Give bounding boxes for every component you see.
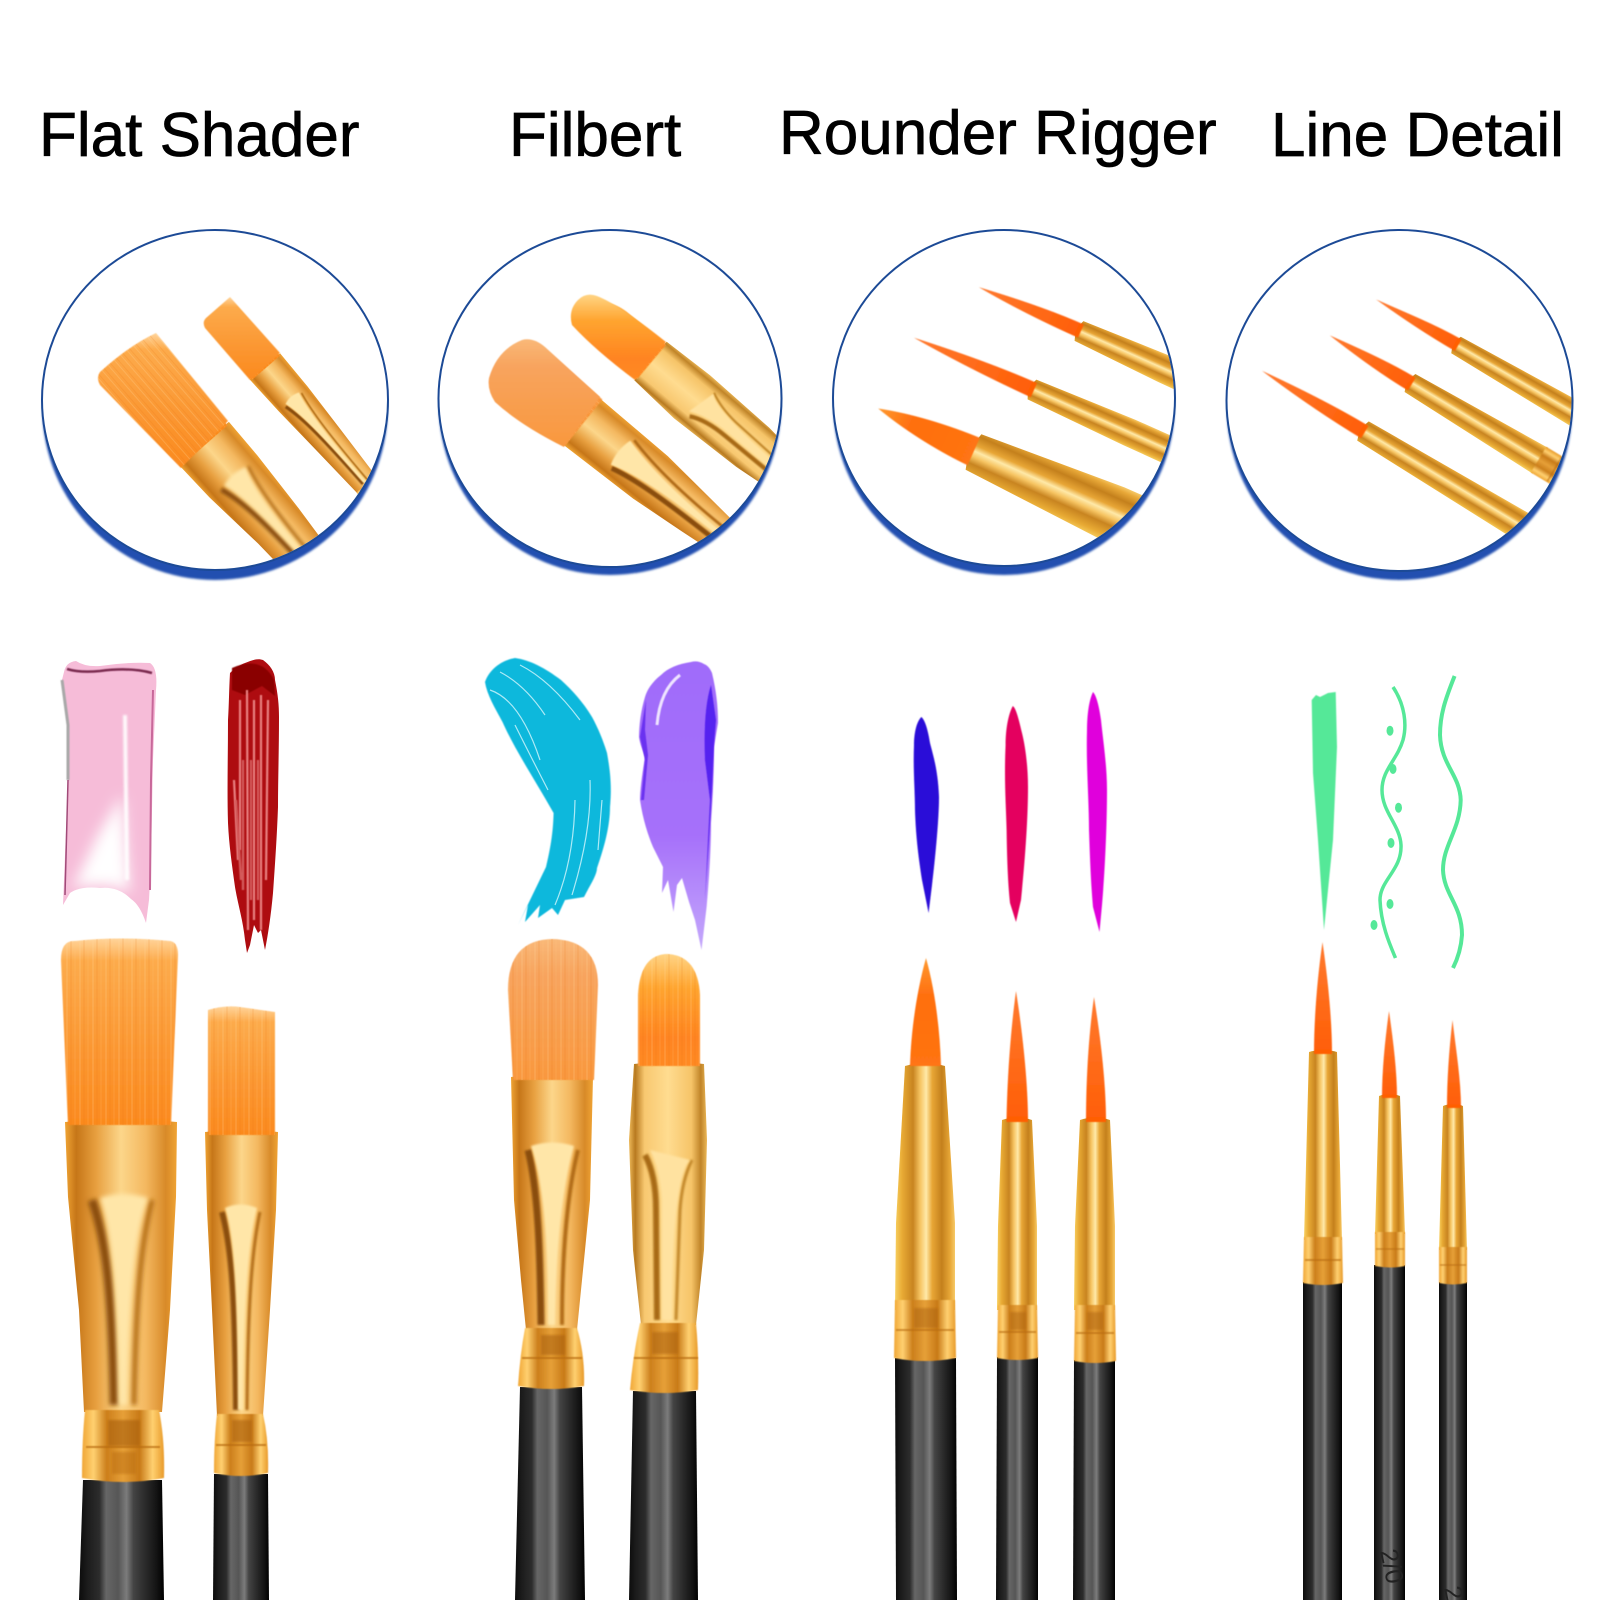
paint stroke: blue (914, 717, 939, 913)
brush: small filbert (629, 954, 707, 1600)
paint stroke: green wave with dots (1370, 687, 1405, 958)
paint stroke: green wedge (1312, 692, 1337, 930)
brush: medium rounder rigger (996, 991, 1038, 1600)
title: Rounder Rigger: Rounder Rigger (779, 99, 1217, 168)
panel: line detail close-up circle (1225, 229, 1574, 582)
handle size mark 2/0: 2/0 (1374, 1546, 1409, 1586)
brush: small flat shader (205, 1006, 278, 1600)
paint stroke: dark red (228, 659, 279, 953)
paint stroke: cyan (485, 658, 611, 925)
paint stroke: magenta (1087, 692, 1107, 932)
brush: large line detail (1303, 942, 1343, 1600)
brush: large rounder rigger (894, 958, 957, 1600)
brush: large flat shader (61, 938, 178, 1600)
paint stroke: green wave line (1440, 676, 1462, 968)
paint stroke: pink (62, 661, 156, 923)
title: Flat Shader: Flat Shader (39, 101, 360, 170)
panel: flat shader close-up circle (40, 229, 390, 582)
brush: medium line detail (1374, 1011, 1405, 1600)
paint stroke: purple (639, 661, 718, 950)
panel: filbert close-up circle (437, 229, 783, 577)
brush: small rounder rigger (1073, 997, 1116, 1600)
panel: rounder rigger close-up circle (832, 229, 1176, 577)
brush: small line detail (1439, 1020, 1467, 1600)
title: Filbert: Filbert (509, 101, 681, 170)
paint stroke: crimson (1005, 706, 1028, 922)
brush: large filbert (508, 939, 598, 1600)
title: Line Detail: Line Detail (1271, 101, 1564, 170)
